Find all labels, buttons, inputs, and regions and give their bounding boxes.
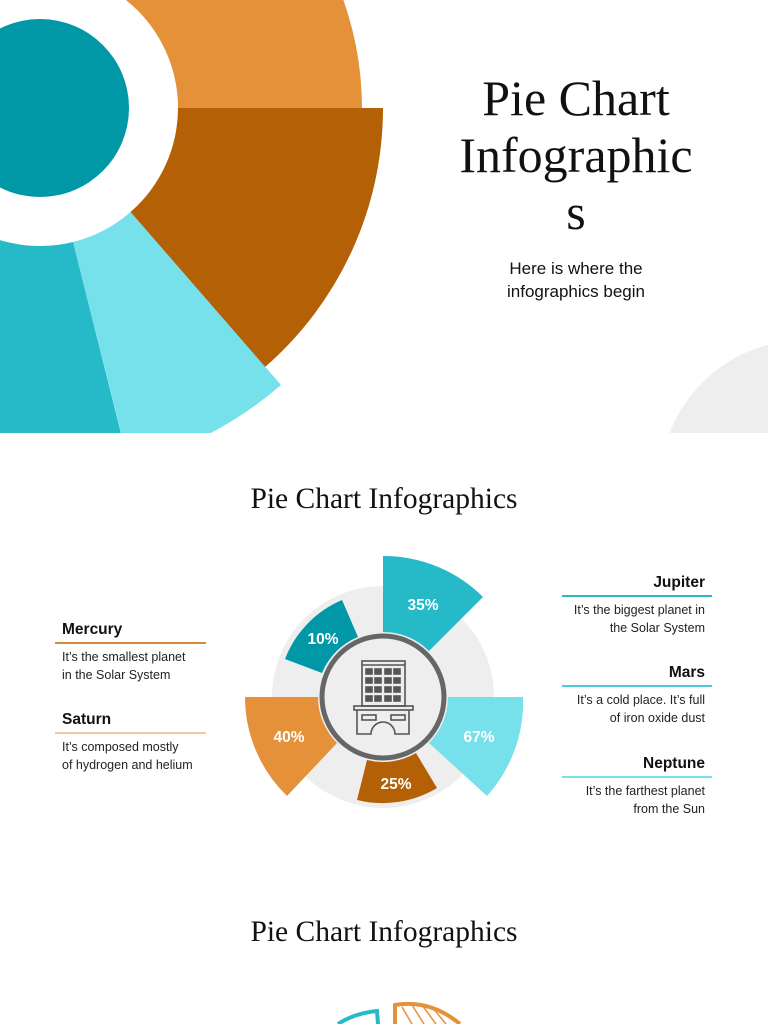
pie: teal center — [0, 19, 129, 197]
wedge 40%: 40% — [273, 729, 305, 746]
label: Saturn: Saturn — [62, 711, 111, 728]
label: Mercury: It’s the smallest planet — [62, 650, 185, 664]
pie: orange segment — [40, 0, 362, 108]
subtitle: infographics begin — [507, 282, 645, 301]
subtitle: Here is where the — [509, 259, 643, 278]
label: Neptune: from the Sun — [633, 802, 705, 816]
hand-drawn pie icon (partial) — [337, 1002, 462, 1024]
label: Mercury: in the Solar System — [62, 668, 170, 682]
wedge 25% — [357, 753, 437, 803]
label: Mercury — [55, 621, 206, 682]
center circle with building icon — [322, 636, 444, 758]
label: Mars — [562, 664, 712, 724]
gray circle decoration — [660, 340, 768, 630]
pie: light cyan segment — [73, 212, 281, 464]
background gray disc — [272, 586, 494, 808]
wedge 10%: 10% — [307, 631, 339, 648]
pie: cyan segment — [0, 108, 149, 558]
wedge 40% — [245, 697, 337, 796]
wedge 10% — [285, 600, 358, 673]
main title: Pie Chart — [482, 70, 670, 126]
label: Saturn: It’s composed mostly — [62, 740, 178, 754]
section 2 heading: Pie Chart Infographics — [250, 483, 518, 515]
wedge 25%: 25% — [380, 776, 412, 793]
wedge 35%: 35% — [407, 597, 439, 614]
label: Neptune: It’s the farthest planet — [586, 784, 705, 798]
wedge 67% — [429, 697, 523, 796]
label: Mars: of iron oxide dust — [610, 710, 705, 724]
label: Jupiter — [562, 574, 712, 634]
wedge 67%: 67% — [463, 729, 495, 746]
subtitle — [507, 259, 645, 301]
label: Mars: It’s a cold place. It’s full — [577, 693, 705, 707]
section 3 heading: Pie Chart Infographics — [250, 916, 518, 948]
wedge 35% — [383, 556, 483, 651]
main title — [459, 70, 693, 240]
label: Jupiter: the Solar System — [610, 620, 705, 634]
label: Mars: Mars — [669, 664, 705, 681]
label: Mercury: Mercury — [62, 621, 122, 638]
label: Jupiter: Jupiter — [653, 574, 705, 591]
label: Saturn: of hydrogen and helium — [62, 758, 193, 772]
pie: dark orange segment — [130, 108, 383, 367]
label: Neptune: Neptune — [643, 755, 705, 772]
main title: Infographic — [459, 127, 693, 183]
label: Jupiter: It’s the biggest planet in — [574, 603, 705, 617]
label: Neptune — [562, 755, 712, 816]
label: Saturn — [55, 711, 206, 772]
main title: s — [566, 184, 586, 240]
top section graphic — [0, 0, 768, 433]
